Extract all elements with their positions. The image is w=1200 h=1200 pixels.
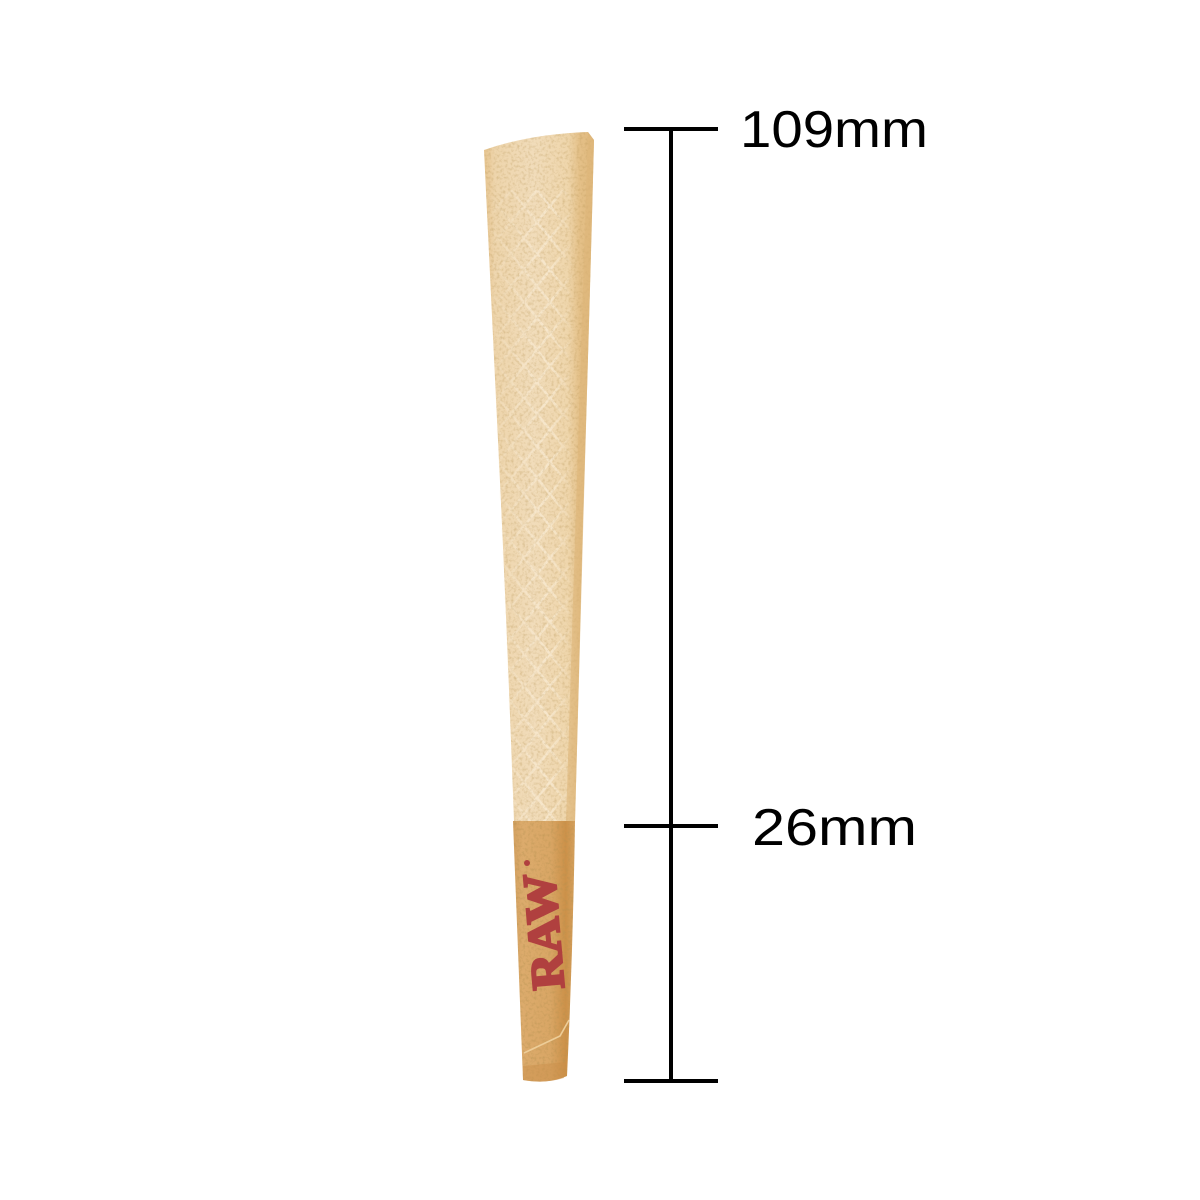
top tick [624,127,718,131]
cone paper body [484,132,594,822]
middle tick [624,824,718,828]
cone filter tip [513,821,575,1082]
measurement scale [624,127,718,1083]
infographic: cone with measurements [484,110,924,1083]
tip twisted end [523,1062,566,1082]
tip wrap crease [524,1020,569,1053]
bottom tick [624,1079,718,1083]
label: total length: 109mm [740,101,928,159]
cone right fold [566,132,594,822]
vertical line [669,128,673,1082]
label: tip length: 26mm [752,799,917,857]
RAW logo: RAW [513,872,574,992]
cone [484,132,594,1082]
tip grain [513,821,575,1082]
cone paper grain [484,132,594,822]
registered mark [524,860,530,866]
cone diamond pattern [504,190,567,821]
